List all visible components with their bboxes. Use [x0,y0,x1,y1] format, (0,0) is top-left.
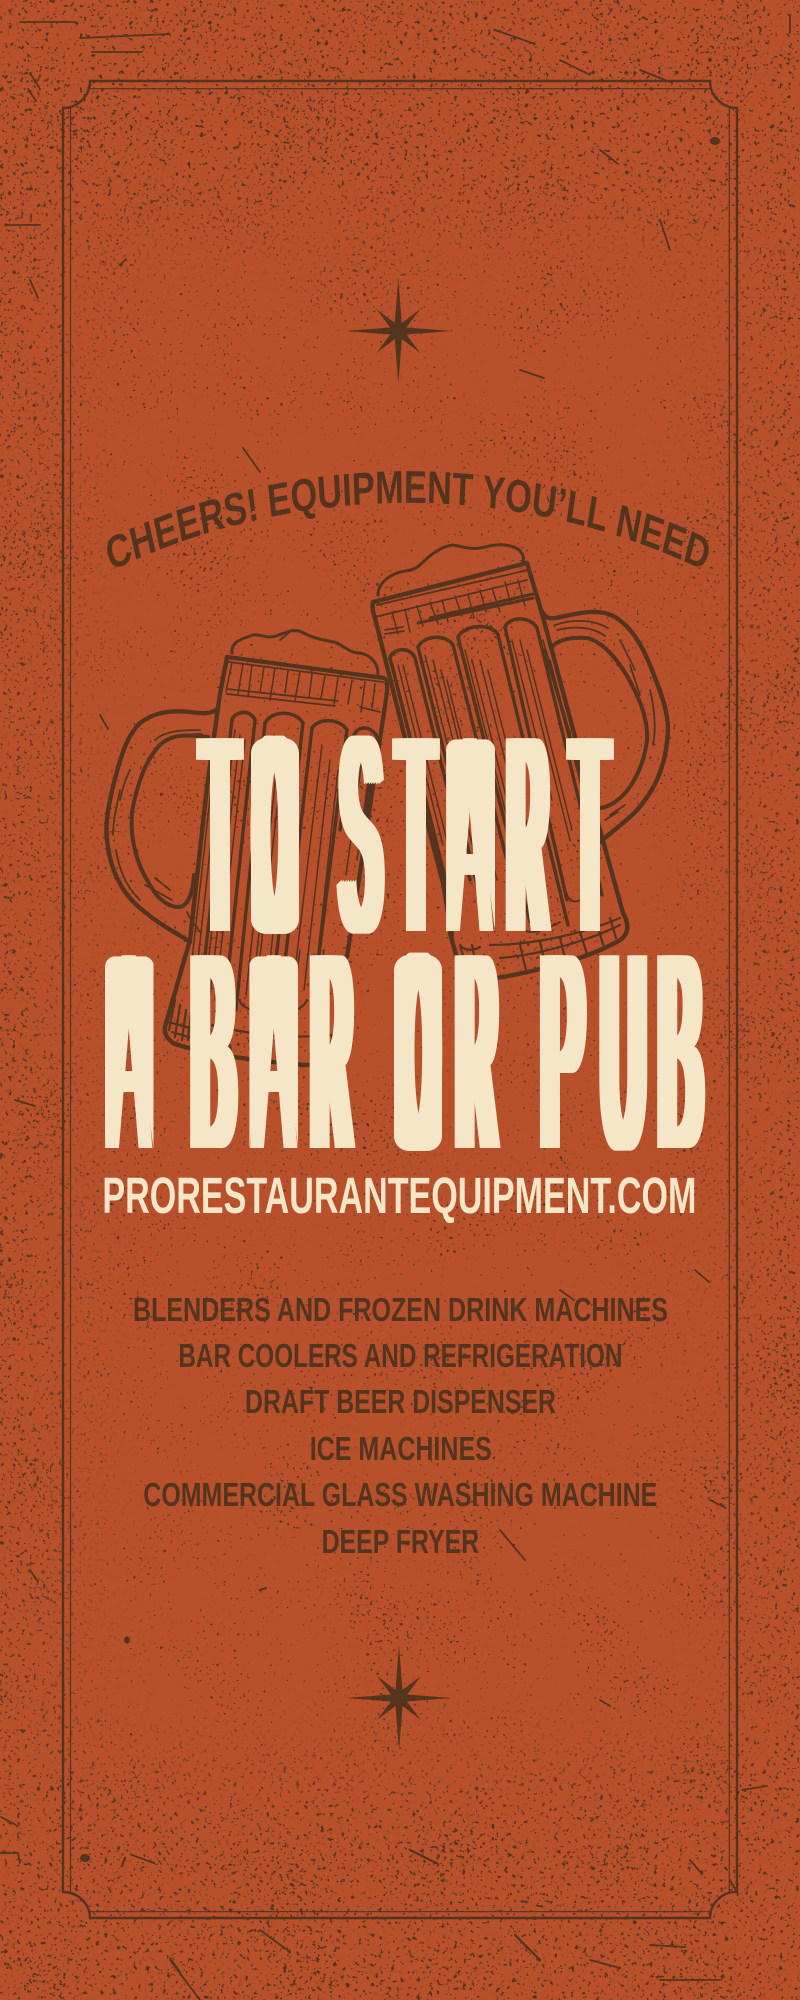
title line: TO START [196,679,614,991]
big right mug [373,545,668,978]
title line: A BAR OR PUB: B [659,896,702,1208]
equipment list: BAR COOLERS AND REFRIGERATION [178,1338,622,1375]
title line: A BAR OR PUB: R [458,896,495,1208]
title line: TO START: R [509,679,547,991]
title line: A BAR OR PUB: B [192,896,235,1208]
title line: A BAR OR PUB: O [400,896,437,1208]
small left mug [106,631,387,1065]
title line: TO START: T [202,679,238,991]
arched heading: CHEERS! EQUIPMENT YOU’LL NEED [107,471,709,567]
equipment list: DRAFT BEER DISPENSER [245,1384,556,1421]
title line: TO START: O [256,679,293,991]
title line: TO START: A [450,679,490,991]
equipment list: ICE MACHINES [310,1431,492,1468]
title line: A BAR OR PUB: R [313,896,350,1208]
equipment list: DEEP FRYER [322,1524,479,1561]
title line: A BAR OR PUB: P [542,896,583,1208]
title line: A BAR OR PUB: A [254,896,293,1208]
title line: TO START: T [572,679,608,991]
title line: A BAR OR PUB: U [602,896,644,1208]
main title [105,736,706,1151]
title line: A BAR OR PUB: A [109,896,148,1208]
title line: TO START: S [340,679,380,991]
title line: TO START: T [398,679,434,991]
title line: A BAR OR PUB [105,896,706,1208]
